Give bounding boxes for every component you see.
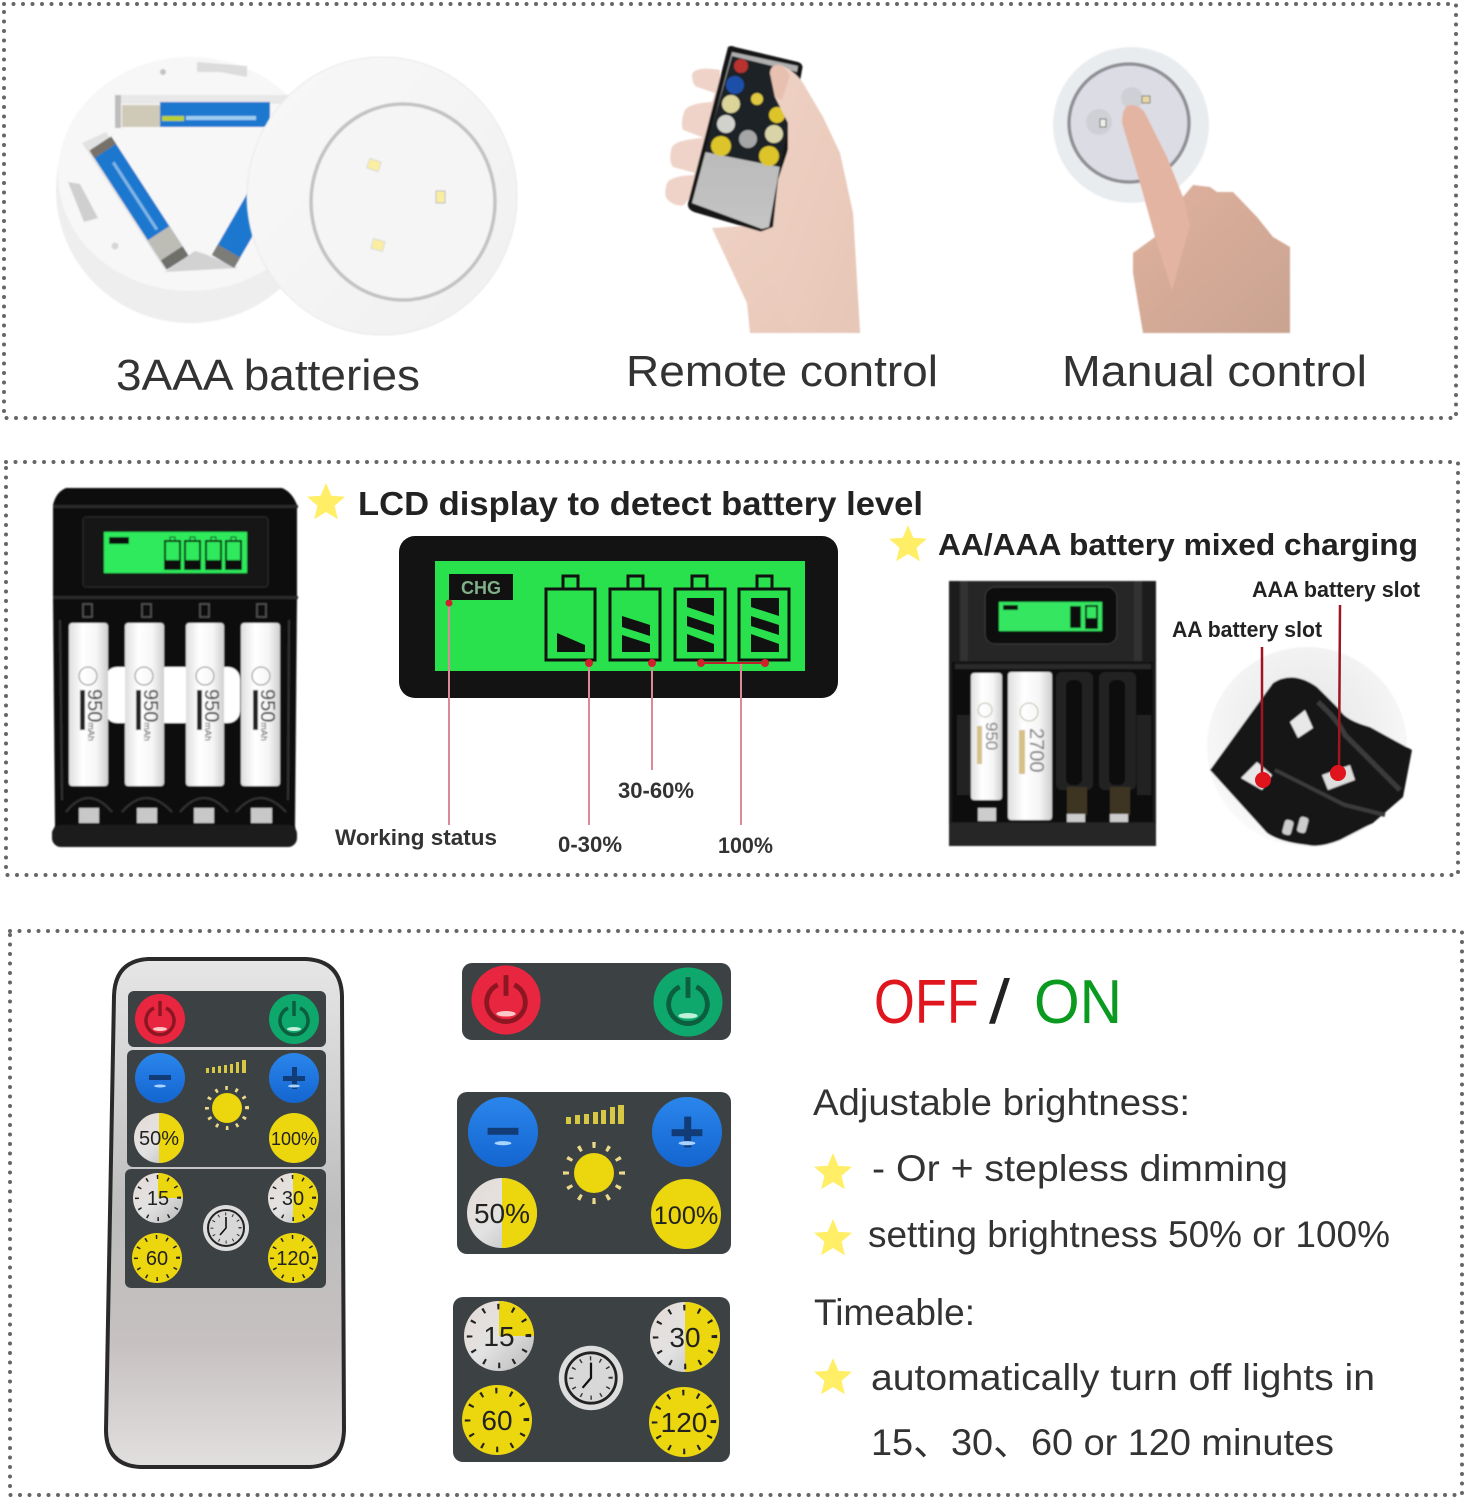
- image: four-slot charger with AAA batteries: 950 mAh: [200, 689, 222, 741]
- icon: clock: [203, 1205, 249, 1251]
- button: on: [269, 994, 319, 1044]
- label: working status: Working status: [335, 825, 497, 850]
- panel: battery charger: [6, 462, 1458, 875]
- icon: star: [814, 1219, 852, 1255]
- heading: off / on: ON: [1034, 968, 1122, 1037]
- detail: timer buttons: [453, 1297, 730, 1462]
- heading: off / on: /: [989, 968, 1011, 1037]
- button: 50%: [134, 1113, 184, 1163]
- button: 120: 120: [276, 1248, 310, 1270]
- image: four-slot charger with AAA batteries: 950 mAh: [256, 689, 278, 741]
- icon: brightness bars large: [566, 1105, 624, 1124]
- button: 100%: 100%: [271, 1129, 317, 1149]
- icon: clock large: [559, 1346, 623, 1410]
- button: off: [135, 994, 185, 1044]
- label: remote control: Remote control: [626, 347, 938, 396]
- button: on large: [654, 968, 722, 1036]
- button: 60: 60: [146, 1248, 168, 1270]
- button: 15: 15: [147, 1188, 169, 1210]
- heading: off / on: OFF: [874, 968, 979, 1037]
- battery level 100% second: [739, 576, 789, 660]
- button: 120: [268, 1233, 318, 1283]
- button: 15 large: 15: [483, 1321, 515, 1352]
- button: 30 large: [650, 1302, 720, 1372]
- text: setting brightness: setting brightness 50% or 100%: [868, 1214, 1390, 1255]
- label: 0-30%: 0-30%: [558, 832, 622, 857]
- image: four-slot charger with AAA batteries: 950 mAh: [83, 689, 105, 741]
- label: 30-60%: 30-60%: [618, 778, 694, 803]
- callout: AA slot marker: [1255, 647, 1271, 788]
- image: puck light front with three LEDs: [247, 57, 517, 335]
- icon: sun: [207, 1088, 247, 1128]
- button: off large: [472, 966, 540, 1034]
- working status indicator: [449, 574, 513, 600]
- button: minus: [135, 1053, 185, 1103]
- detail: brightness buttons: [457, 1092, 731, 1254]
- label: AA battery slot: AA battery slot: [1172, 617, 1323, 642]
- button: 100%: [269, 1113, 319, 1163]
- panel: light features: [4, 4, 1456, 418]
- button: 60 large: 60: [481, 1405, 513, 1436]
- icon: brightness bars: [206, 1060, 246, 1073]
- heading: mixed charging: AA/AAA battery mixed charging: [938, 527, 1418, 562]
- panel: remote functions: [10, 931, 1462, 1495]
- label: manual control: Manual control: [1062, 347, 1367, 396]
- image: charger with AA and AAA batteries: 950: [982, 722, 1001, 750]
- image: charger with AA and AAA batteries: [949, 581, 1156, 846]
- button: 50% large: [467, 1178, 537, 1248]
- diagram: LCD battery level display: [399, 536, 838, 698]
- image: charger with AA and AAA batteries: 2700: [1025, 728, 1047, 772]
- icon: star: [307, 483, 345, 519]
- button: 120 large: 120: [661, 1407, 707, 1438]
- text: adjustable brightness: Adjustable brightness:: [813, 1082, 1190, 1123]
- button: 30: 30: [282, 1188, 304, 1210]
- button: 60: [132, 1233, 182, 1283]
- button: 30: [268, 1173, 318, 1223]
- button: minus large: [468, 1097, 538, 1167]
- button: 100% large: 100%: [654, 1202, 718, 1230]
- icon: star: [814, 1153, 852, 1189]
- heading: off / on: [874, 968, 1122, 1037]
- image: close-up of battery slots: [1207, 647, 1412, 847]
- icon: star: [814, 1358, 852, 1394]
- detail: power buttons: [462, 963, 731, 1040]
- callout lines: [446, 600, 769, 825]
- text: timer minutes: 15、30、60 or 120 minutes: [871, 1422, 1334, 1463]
- image: four-slot charger with AAA batteries: 950 mAh: [139, 689, 161, 741]
- button: 15 large: [464, 1301, 534, 1371]
- icon: star: [889, 525, 927, 561]
- image: full remote control: [106, 959, 344, 1467]
- battery level 30-60%: [610, 576, 660, 660]
- button: plus large: [652, 1097, 722, 1167]
- text: timeable: Timeable:: [814, 1292, 975, 1333]
- working status indicator: CHG: [461, 578, 501, 598]
- heading: LCD display: LCD display to detect battery level: [358, 485, 923, 522]
- icon: sun large: [566, 1145, 622, 1201]
- image: open puck light with 3 AAA batteries: [56, 57, 324, 323]
- button: 100% large: [651, 1179, 721, 1249]
- label: 100%: 100%: [718, 833, 773, 858]
- callout: AAA slot marker: [1330, 605, 1346, 781]
- text: turn off lights: automatically turn off lights in: [871, 1357, 1375, 1398]
- battery level 0-30%: [546, 576, 595, 660]
- button: 50% large: 50%: [474, 1198, 530, 1229]
- text: stepless dimming: - Or + stepless dimming: [872, 1148, 1288, 1189]
- battery level 100% first: [675, 576, 725, 660]
- image: finger pressing puck light: [1053, 47, 1290, 333]
- button: 60 large: [462, 1385, 532, 1455]
- label: 3AAA batteries: 3AAA batteries: [116, 351, 420, 400]
- image: hand holding remote control: [665, 46, 860, 333]
- image: four-slot charger with AAA batteries: [52, 488, 298, 847]
- label: AAA battery slot: AAA battery slot: [1252, 577, 1421, 602]
- button: plus: [269, 1053, 319, 1103]
- button: 50%: 50%: [139, 1128, 179, 1150]
- button: 30 large: 30: [669, 1322, 701, 1353]
- button: 15: [133, 1173, 183, 1223]
- button: 120 large: [649, 1387, 719, 1457]
